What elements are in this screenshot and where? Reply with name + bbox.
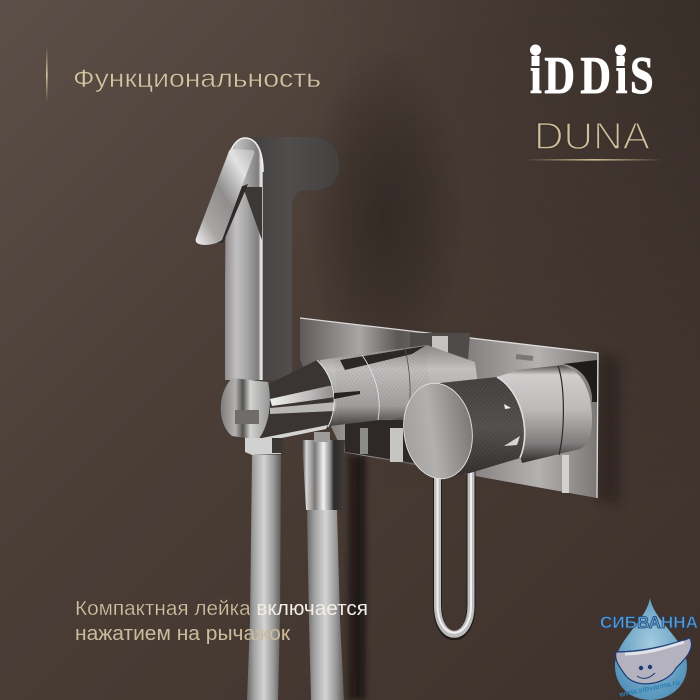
brand logo: IDDIS DUNA: D — [544, 47, 575, 105]
holder bracket — [221, 378, 283, 455]
caption: Компактная лейка включается — [75, 598, 368, 620]
spray head: chrome front — [225, 138, 263, 380]
spray head: lever trigger — [196, 149, 254, 245]
hoses — [247, 455, 344, 700]
wall plate shadow and mixer plate — [300, 318, 620, 505]
brand logo: IDDIS DUNA: S — [630, 47, 654, 105]
brand logo: IDDIS DUNA: D — [580, 47, 611, 105]
spray head: dark back — [240, 137, 339, 380]
brand logo: IDDIS DUNA — [525, 44, 663, 161]
mixer handle: chrome cylinder — [497, 360, 597, 463]
spout cone — [258, 360, 360, 442]
mixer handle: knurled grip — [440, 377, 525, 478]
watermark: Sibvanna logo: www.sibvanna.ru — [618, 677, 681, 699]
watermark: Sibvanna logo — [600, 598, 698, 700]
brand logo: IDDIS DUNA: DUNA — [534, 116, 651, 158]
hose connector nut — [302, 432, 345, 510]
caption: нажатием на рычажок — [75, 623, 290, 645]
watermark: Sibvanna logo: СИБВАННА — [600, 613, 698, 632]
mixer body: knurled barrel — [320, 345, 478, 426]
watermark drop with bathtub — [615, 598, 691, 700]
mixer handle: end disc — [398, 379, 478, 483]
brand logo: IDDIS DUNA: i — [530, 47, 542, 105]
brand logo: IDDIS DUNA: i — [616, 47, 627, 105]
caption — [75, 598, 368, 645]
section title with gold rule: Функциональность — [73, 65, 321, 93]
mixer handle: loop lever — [438, 470, 471, 636]
